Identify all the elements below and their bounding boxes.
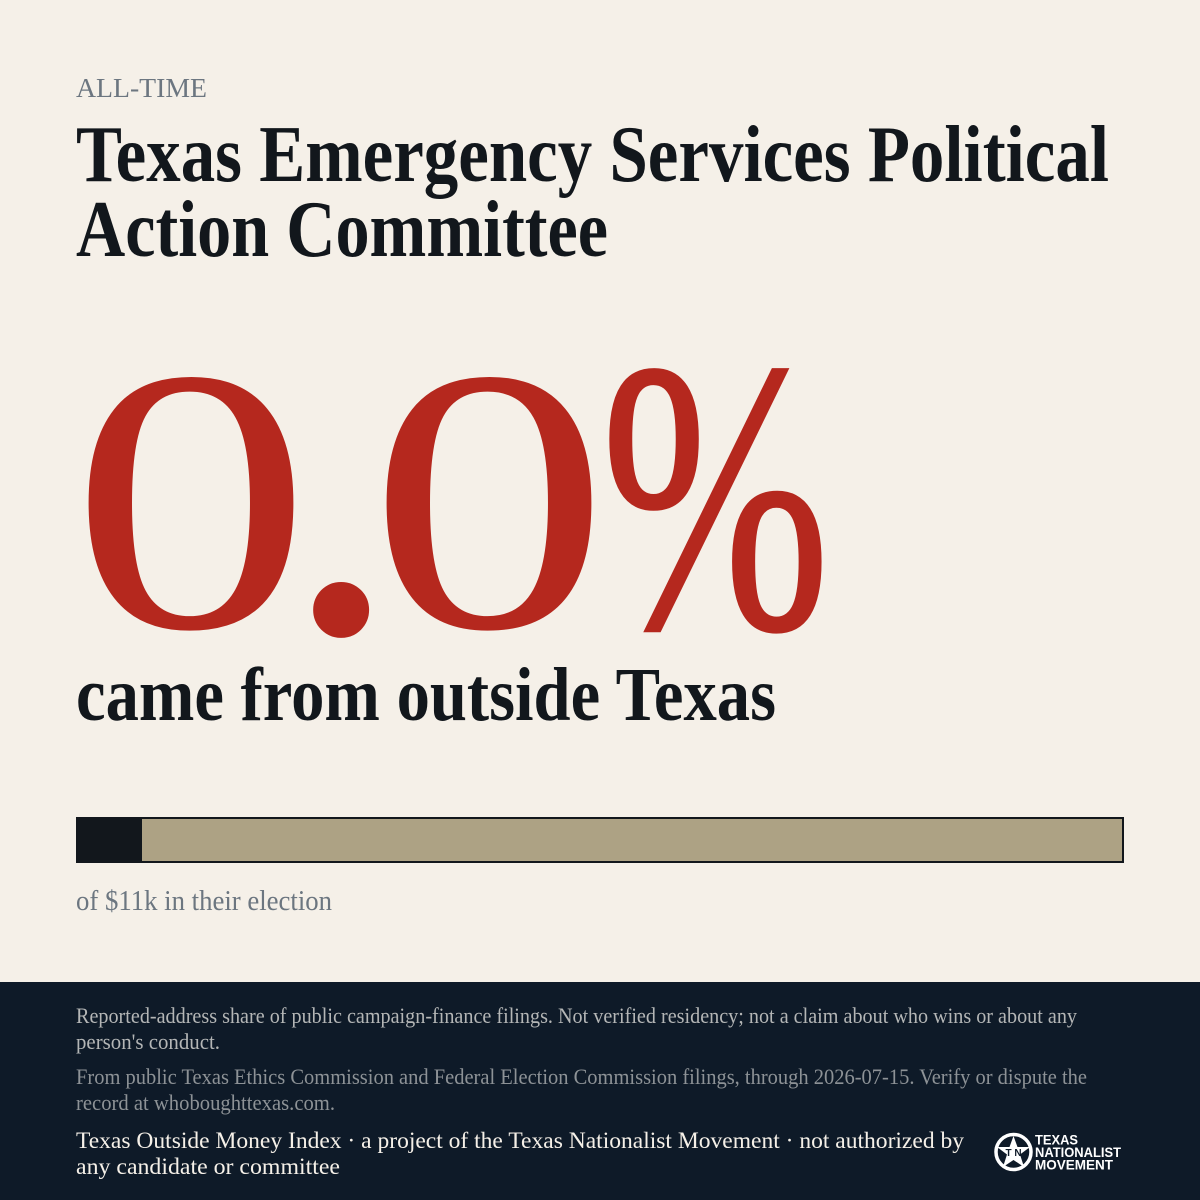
attribution text: any candidate or committee bbox=[76, 1154, 340, 1179]
headline percentage: 0 bbox=[368, 292, 610, 709]
eyebrow label: ALL-TIME bbox=[76, 73, 207, 103]
disclaimer text: person's conduct. bbox=[76, 1029, 220, 1054]
icon: Texas Nationalist Movement logo: T N bbox=[1005, 1148, 1022, 1159]
headline percentage: 0 bbox=[70, 292, 312, 709]
disclaimer text: Reported-address share of public campaign-finance filings. Not verified residency; not a claim about who wins or about any bbox=[76, 1003, 1077, 1028]
headline percentage: . bbox=[298, 326, 384, 708]
footer panel bbox=[0, 982, 1200, 1200]
headline percentage: % bbox=[601, 282, 830, 711]
progress bar bbox=[76, 817, 1123, 863]
source text: record at whoboughttexas.com. bbox=[76, 1090, 335, 1115]
title bbox=[76, 111, 1109, 274]
attribution text: Texas Outside Money Index · a project of the Texas Nationalist Movement · not authorized by bbox=[76, 1128, 964, 1153]
icon: Texas Nationalist Movement logo: MOVEMENT bbox=[1035, 1158, 1114, 1172]
subheading: came from outside Texas bbox=[76, 653, 776, 737]
disclaimer text bbox=[76, 1003, 1077, 1054]
title: Action Committee bbox=[76, 186, 608, 274]
headline percentage bbox=[70, 282, 830, 711]
source text: From public Texas Ethics Commission and Federal Election Commission filings, through 2026-07-15. Verify or dispute the bbox=[76, 1064, 1087, 1089]
attribution text bbox=[76, 1128, 964, 1179]
icon: Texas Nationalist Movement logo: NATIONALIST bbox=[1035, 1145, 1122, 1160]
icon: Texas Nationalist Movement logo bbox=[996, 1132, 1122, 1172]
source text bbox=[76, 1064, 1087, 1115]
bar caption: of $11k in their election bbox=[76, 885, 332, 917]
icon: Texas Nationalist Movement logo: TEXAS bbox=[1035, 1132, 1078, 1148]
